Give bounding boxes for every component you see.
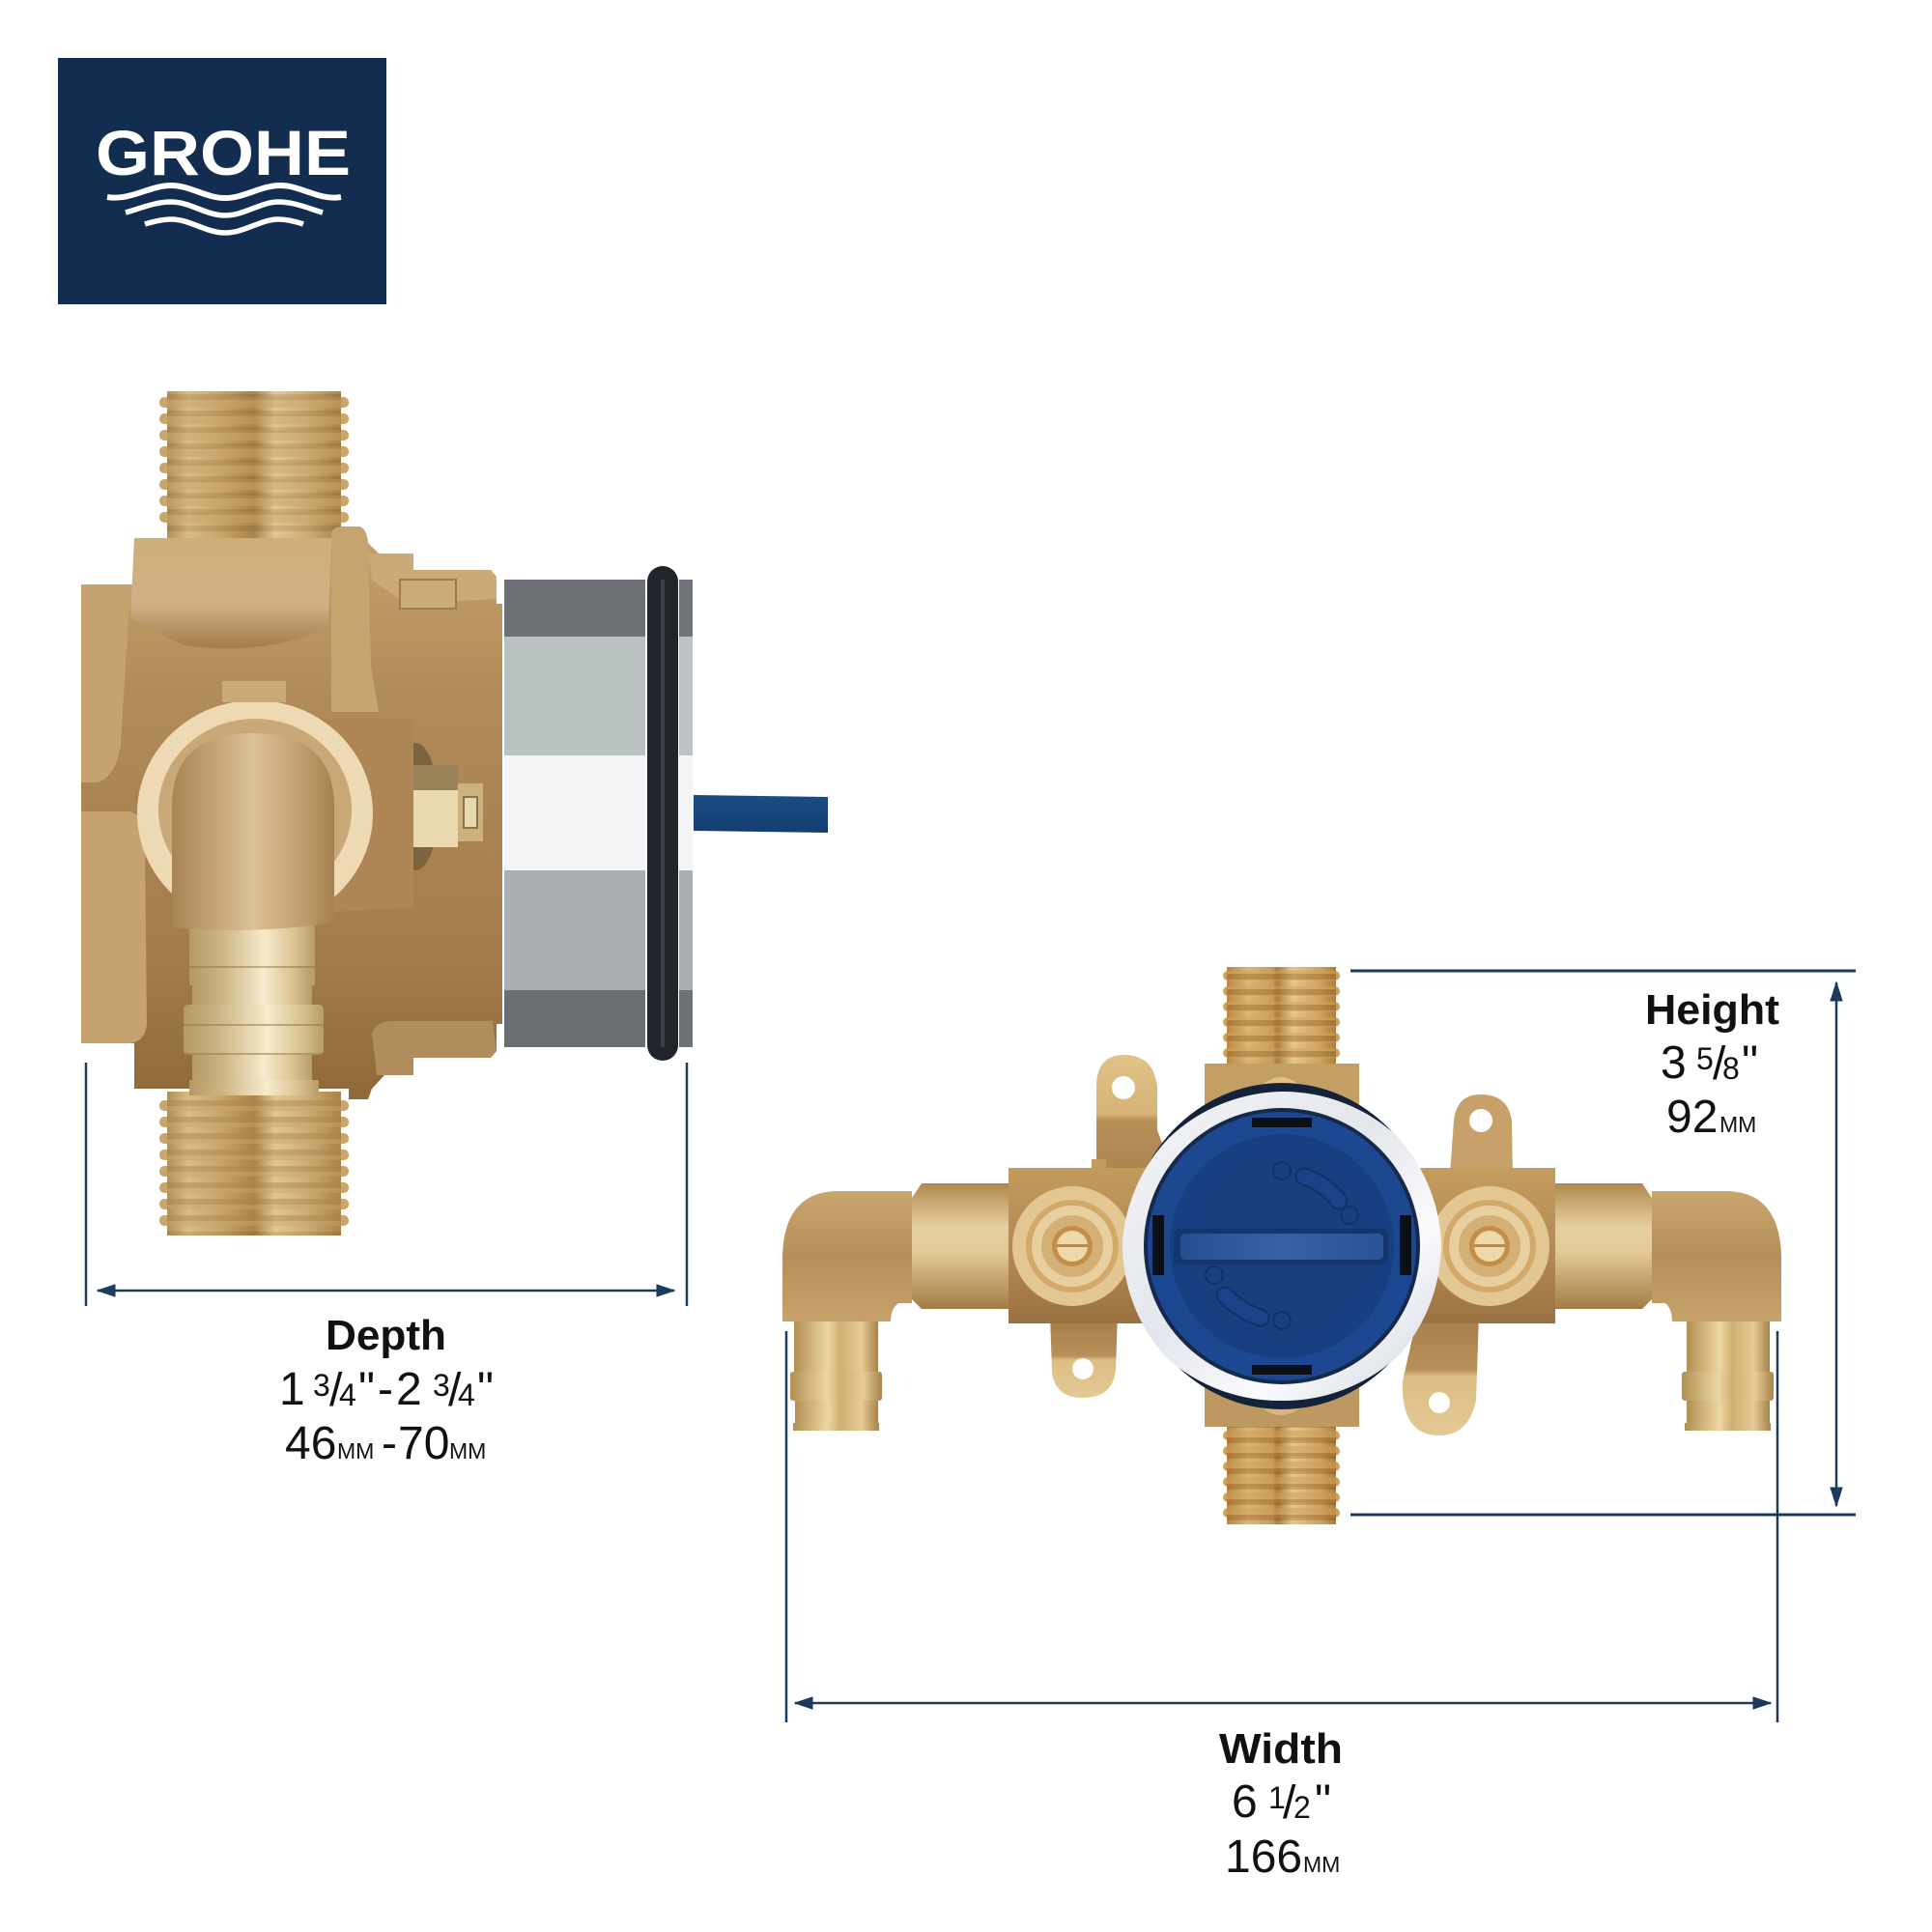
width label: Width — [1219, 1725, 1343, 1773]
right tube — [1555, 1183, 1652, 1309]
width label — [1219, 1725, 1343, 1883]
depth label: 70 — [398, 1418, 449, 1469]
depth label: 4 — [458, 1378, 475, 1412]
top and bottom collars — [1205, 1064, 1359, 1427]
left flange blocks — [81, 584, 147, 1043]
black o-ring — [647, 566, 678, 1061]
inner rim — [158, 719, 352, 900]
blue tab — [694, 795, 828, 833]
left elbow — [782, 1191, 912, 1321]
depth extension lines and arrow — [86, 1063, 687, 1306]
depth label: MM — [449, 1438, 486, 1463]
height label: 3 — [1661, 1037, 1687, 1089]
height label — [1645, 986, 1779, 1143]
depth label: 3 — [313, 1368, 330, 1403]
retaining notches — [1152, 1118, 1411, 1375]
depth label: / — [329, 1365, 343, 1416]
depth label: Depth — [326, 1312, 446, 1359]
height label: Height — [1645, 986, 1779, 1034]
cast brass body — [81, 526, 502, 1099]
right valve block — [1391, 1168, 1555, 1323]
thin plate — [679, 580, 693, 1047]
height label: " — [1742, 1037, 1758, 1089]
depth label: 3 — [433, 1368, 450, 1403]
right valve cap — [1430, 1186, 1549, 1306]
height label: / — [1713, 1038, 1726, 1090]
bottom thread — [159, 1092, 349, 1236]
left valve cap — [1012, 1186, 1132, 1306]
small lug — [400, 580, 456, 609]
depth label: 4 — [339, 1378, 356, 1412]
depth label: 1 — [279, 1364, 305, 1415]
vertical fin — [331, 526, 379, 712]
depth label: 46 — [285, 1418, 336, 1469]
embossed dots and slots — [1206, 1162, 1358, 1329]
depth label — [279, 1312, 494, 1469]
recess behind screw — [392, 743, 439, 870]
logo wordmark: GROHE — [96, 117, 351, 188]
GROHE logo — [58, 58, 386, 304]
depth label: / — [448, 1365, 462, 1416]
top thread — [159, 391, 349, 538]
PEX barb fitting — [184, 925, 324, 1095]
width label: " — [1315, 1776, 1331, 1828]
hex adjustment screw — [413, 765, 483, 847]
height label: 5 — [1696, 1041, 1714, 1076]
depth label: MM — [337, 1438, 374, 1463]
side view of valve — [81, 391, 828, 1236]
left valve block — [1009, 1159, 1188, 1323]
elbow — [172, 733, 334, 930]
width dimension — [786, 1331, 1777, 1883]
width label: 2 — [1293, 1790, 1311, 1825]
depth label: - — [382, 1418, 397, 1469]
height dimension — [1350, 971, 1856, 1515]
depth label: - — [378, 1364, 393, 1415]
left tube — [912, 1183, 1009, 1309]
height label: 8 — [1722, 1051, 1740, 1086]
depth label: " — [358, 1364, 375, 1415]
dark gasket — [1127, 1083, 1436, 1409]
top collar — [130, 538, 331, 648]
right elbow — [1652, 1191, 1781, 1321]
width label: / — [1283, 1777, 1296, 1829]
cream ring of elbow — [137, 700, 373, 926]
lower right flange — [372, 1021, 497, 1075]
depth dimension — [86, 1063, 687, 1469]
blue cap — [1144, 1108, 1420, 1384]
top thread — [1223, 967, 1340, 1065]
left PEX fitting — [790, 1321, 882, 1431]
width label: 166 — [1225, 1832, 1302, 1883]
left bottom mounting ear — [1050, 1314, 1118, 1398]
upper right flange — [368, 554, 497, 604]
height label: MM — [1719, 1112, 1756, 1137]
height lines and arrow — [1350, 971, 1856, 1515]
bottom thread — [1223, 1426, 1340, 1524]
front view of valve — [782, 967, 1781, 1524]
width label: 1 — [1268, 1780, 1286, 1815]
right PEX fitting — [1682, 1321, 1774, 1431]
small top tab — [222, 681, 286, 702]
chrome ring — [1122, 1092, 1441, 1401]
height label: 92 — [1666, 1092, 1718, 1143]
silver nut — [504, 580, 645, 1047]
logo waves — [107, 185, 341, 233]
depth label: " — [477, 1364, 494, 1415]
right bottom mounting ear — [1403, 1304, 1479, 1435]
handle bar — [1174, 1229, 1388, 1264]
side arm of elbow housing — [309, 719, 413, 913]
depth label: 2 — [396, 1364, 422, 1415]
right top mounting ear — [1450, 1094, 1513, 1174]
left top mounting ear — [1096, 1055, 1174, 1174]
width label: MM — [1303, 1852, 1340, 1877]
width lines and arrow — [786, 1331, 1777, 1722]
width label: 6 — [1232, 1776, 1258, 1828]
